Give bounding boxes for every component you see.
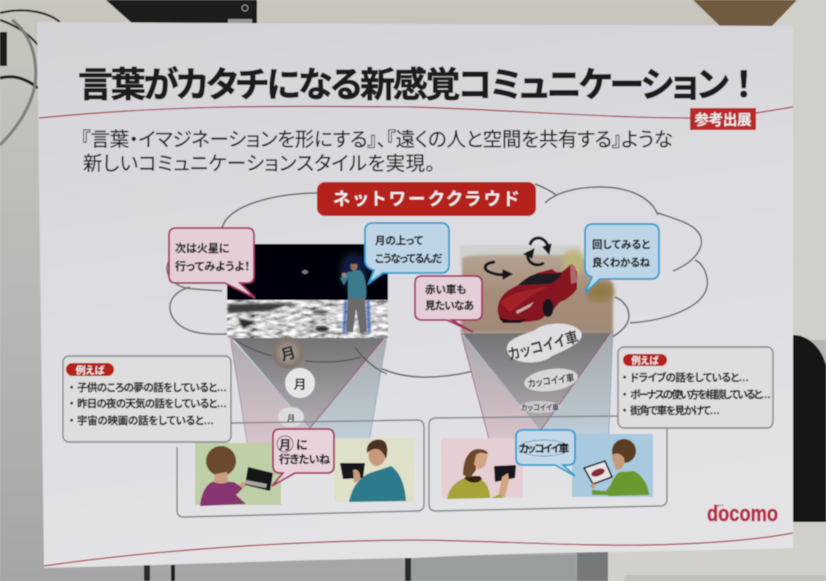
- examples tag: 例えば: [631, 355, 660, 367]
- title: ！: [735, 66, 753, 105]
- speech bubble: cool car: [516, 430, 575, 476]
- speech bubble: on the moon: こうなってるんだ: [375, 253, 443, 265]
- shelf at lower right: [608, 522, 826, 581]
- examples list: 宇宙の映画の話をしていると…: [77, 414, 214, 427]
- examples list: ・: [622, 405, 627, 417]
- title: 言葉がカタチになる新感覚コミュニケーション: [78, 66, 729, 105]
- car word tokens: カッコイイ車: [506, 329, 580, 364]
- examples list: [69, 381, 227, 427]
- speech bubble: on the moon: [365, 223, 449, 283]
- right conversation panel: [429, 416, 667, 511]
- rotate arrows: [485, 238, 551, 279]
- woman with black tablet: [441, 438, 523, 499]
- examples list: 子供のころの夢の話をしていると…: [77, 381, 227, 394]
- docomo logo: NTT: [716, 503, 724, 508]
- examples list: 街角で車を見かけて…: [630, 404, 720, 417]
- moon projection beams: [230, 336, 387, 474]
- moon word tokens: 月: [293, 377, 307, 392]
- speech bubble: red car: 見たいなあ: [425, 300, 474, 312]
- examples list: 昨日の夜の天気の話をしていると…: [77, 397, 227, 410]
- examples list: ・: [69, 398, 74, 410]
- speech bubble: want to go to the moon: 行きたいね: [279, 452, 330, 466]
- boy with picture tablet: [572, 434, 653, 497]
- cables at left: [0, 10, 60, 145]
- speech bubble: rotate it: [585, 224, 659, 293]
- speech bubble: rotate it: 良くわかるね: [592, 256, 651, 269]
- examples list: ドライブの話をしていると…: [630, 371, 749, 384]
- speech bubble: red car: [415, 276, 482, 332]
- speech bubble: rotate it: 回してみると: [592, 239, 650, 251]
- woman with tablet: [195, 443, 281, 506]
- docomo logo: docomo: [707, 501, 778, 526]
- left examples box: [63, 356, 231, 442]
- intro text: 『言葉・イマジネーションを形にする』、『遠くの人と空間を共有する』ような: [81, 129, 673, 151]
- easel stand: [144, 550, 608, 581]
- moon scene image: [227, 244, 388, 338]
- examples list: ボーナスの使い方を相談していると…: [630, 388, 771, 401]
- examples tag: 例えば: [76, 364, 105, 377]
- speech bubble: want to go to the moon: 月: [279, 438, 291, 452]
- avatar standing on the moon: [341, 254, 369, 333]
- right examples box: [618, 347, 773, 428]
- top red rule: [39, 106, 793, 118]
- examples tag: [66, 363, 114, 377]
- network cloud label: [317, 182, 536, 216]
- examples list: ・: [69, 415, 74, 427]
- speech bubble: want to go to the moon: に: [296, 438, 308, 452]
- car word tokens: カッコイイ車: [527, 372, 576, 390]
- left conversation panel: [177, 420, 424, 517]
- car scene image: [460, 238, 614, 333]
- car projection beams: [461, 330, 613, 468]
- examples list: [622, 371, 771, 417]
- speech bubble: next Mars: 行ってみようよ！: [175, 259, 250, 273]
- moon word tokens: 月: [279, 344, 298, 365]
- right wall: [760, 0, 826, 340]
- speech bubble: red car: 赤い車も: [425, 283, 466, 296]
- black bag at right: [793, 335, 826, 522]
- examples list: ・: [69, 382, 74, 394]
- brown cardboard corner: [693, 0, 797, 26]
- intro text: [81, 129, 673, 175]
- speech bubble: next Mars: 次は火星に: [175, 241, 229, 255]
- moon word tokens: [272, 337, 315, 427]
- speech bubble: next Mars: [169, 228, 255, 298]
- examples tag: [623, 354, 667, 367]
- badge: reference exhibit: [690, 108, 756, 130]
- red sports car: [498, 264, 577, 323]
- moon word tokens: 月: [287, 414, 295, 423]
- bottom red rule: [44, 533, 793, 566]
- examples list: ・: [622, 389, 627, 401]
- man with tablet: [334, 438, 414, 502]
- intro text: 新しいコミュニケーションスタイルを実現。: [83, 153, 435, 175]
- examples list: ・: [622, 372, 627, 384]
- black device behind poster: [106, 0, 257, 24]
- speech bubble: cool car: カッコイイ車: [519, 442, 570, 455]
- cloud outline: [167, 184, 707, 377]
- speech bubble: want to go to the moon: [272, 429, 334, 486]
- speech bubble: on the moon: 月の上って: [375, 234, 423, 247]
- badge: reference exhibit: 参考出展: [694, 112, 752, 129]
- car word tokens: [506, 324, 582, 413]
- network cloud label: ネットワーククラウド: [333, 189, 519, 209]
- car word tokens: カッコイイ車: [521, 402, 559, 412]
